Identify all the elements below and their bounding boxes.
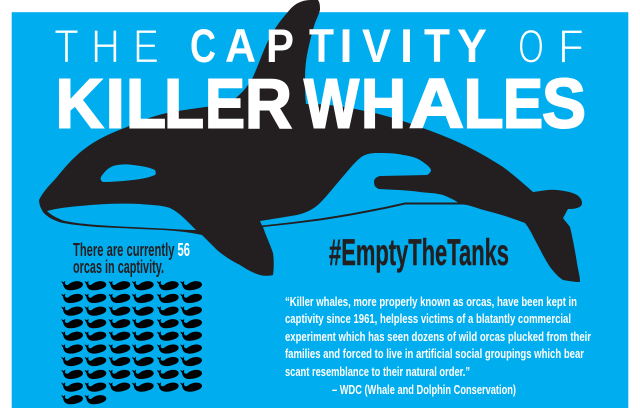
title line: killer whales: L xyxy=(126,64,166,142)
title line: the captivity of: T xyxy=(54,20,79,72)
title line: the captivity of: A xyxy=(225,19,256,72)
captivity count statement xyxy=(73,240,190,277)
title line: the captivity of: V xyxy=(362,19,392,72)
title line: killer whales: L xyxy=(464,64,504,142)
title line: killer whales: H xyxy=(361,64,406,142)
title line: killer whales: E xyxy=(205,64,245,142)
quote from WDC xyxy=(285,294,591,397)
title line: the captivity of: I xyxy=(400,19,413,72)
title line: the captivity of: P xyxy=(266,19,294,72)
title line: killer whales: L xyxy=(164,64,204,142)
title line: the captivity of: I xyxy=(340,19,353,72)
title line: killer whales: R xyxy=(245,64,292,142)
title line: killer whales: S xyxy=(542,64,586,142)
title line: the captivity of: T xyxy=(424,19,450,72)
title line: the captivity of: C xyxy=(190,19,216,72)
saddle patch and flipper gap xyxy=(260,153,458,226)
captivity count statement: orcas in captivity. xyxy=(73,257,164,277)
title line: the captivity of: E xyxy=(133,20,159,72)
orca illustration xyxy=(39,0,582,282)
title line: the captivity of: F xyxy=(558,20,584,72)
title line: killer whales: W xyxy=(304,64,359,142)
title line: killer whales: I xyxy=(106,64,125,142)
title line: the captivity of: O xyxy=(518,20,544,72)
eye patch xyxy=(101,164,156,182)
title line: the captivity of: H xyxy=(91,20,120,72)
title xyxy=(54,19,586,142)
orca silhouette xyxy=(39,0,582,282)
quote from WDC: – WDC (Whale and Dolphin Conservation) xyxy=(332,382,516,397)
hashtag: #EmptyTheTanks xyxy=(329,232,509,273)
title line: killer whales: E xyxy=(503,64,543,142)
title line: the captivity of xyxy=(54,19,584,72)
title line: the captivity of: T xyxy=(309,19,334,72)
title line: killer whales: K xyxy=(56,64,104,142)
title line: killer whales xyxy=(56,64,586,142)
captivity count statement: There are currently 56 xyxy=(73,240,190,260)
quote from WDC: scant resemblance to their natural order.” xyxy=(285,364,470,379)
title line: killer whales: A xyxy=(409,64,464,142)
title line: the captivity of: Y xyxy=(457,19,487,72)
mouth patch xyxy=(47,204,196,230)
pictogram: 56 whale icons xyxy=(61,281,202,404)
